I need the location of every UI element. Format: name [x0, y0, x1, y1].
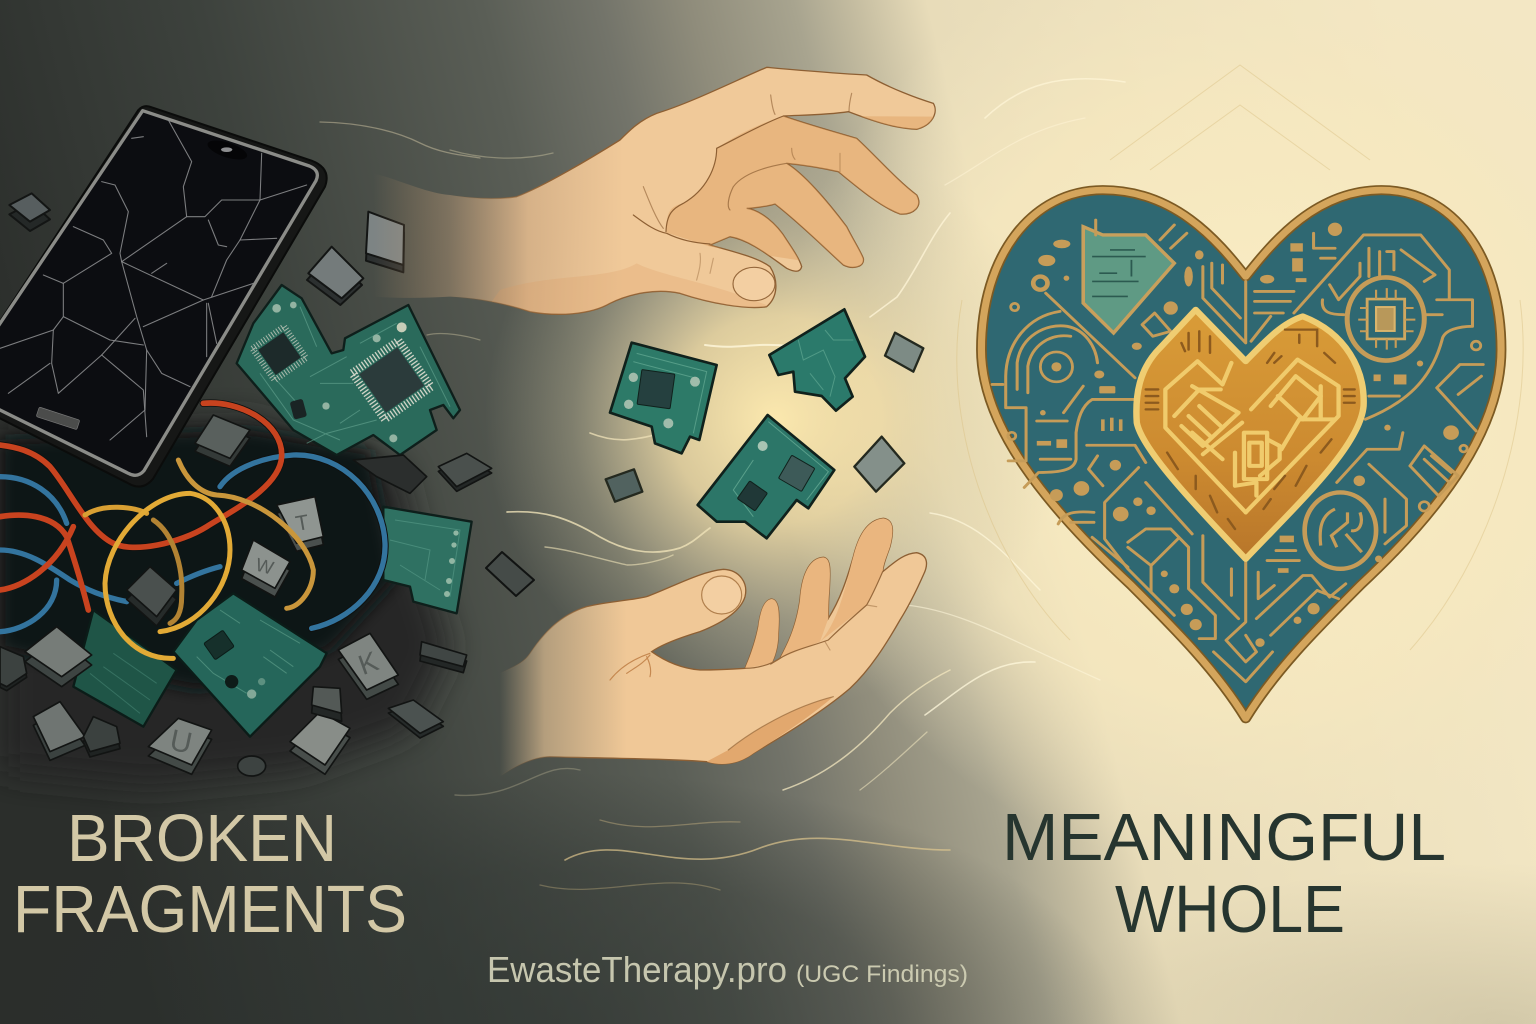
keycaps on top of the wires — [127, 540, 290, 626]
circuit board: upper pile board — [237, 285, 460, 455]
keycap letters: K — [354, 645, 383, 681]
fragment: jagged board, top — [769, 309, 865, 411]
loose keycaps near the phone — [9, 193, 404, 305]
circuit board: lower left — [73, 610, 177, 727]
circuit ring lower right — [1305, 492, 1376, 569]
keycap letters: T — [294, 510, 311, 536]
processor ring — [1347, 277, 1424, 361]
green chip panel — [1083, 227, 1174, 333]
title: meaningful whole: MEANINGFUL — [1002, 800, 1446, 875]
keycap letters — [167, 510, 383, 761]
fragment: keycaps — [606, 333, 923, 502]
scattered pile: boards, keycaps and tangled wires — [0, 403, 492, 776]
title: meaningful whole: WHOLE — [1115, 872, 1345, 947]
circuit pads — [1037, 223, 1459, 647]
inner golden heart — [1136, 310, 1364, 559]
upper reaching hand — [373, 67, 950, 327]
flowing energy lines — [320, 79, 1125, 890]
title: broken fragments — [13, 801, 407, 947]
source credit: EwasteTherapy.pro — [487, 949, 787, 990]
title: broken fragments: BROKEN — [67, 801, 337, 876]
circuit board: centre — [173, 593, 327, 737]
loose keycap to the right of the pile — [486, 552, 534, 596]
debris pile shadow — [0, 420, 450, 785]
keycap letters: U — [167, 724, 195, 761]
circuit board: right — [383, 507, 472, 613]
tangled wires — [0, 403, 385, 658]
keycap letters: W — [253, 554, 276, 579]
source credit — [487, 949, 968, 990]
circuit ring nodes — [1008, 276, 1481, 511]
fragment: board with chip, left — [610, 343, 717, 453]
smashed phone with cracked screen — [0, 106, 327, 487]
heart outer body — [981, 190, 1501, 718]
fragment: board with two chips, bottom — [698, 415, 834, 538]
floating fragments — [606, 309, 923, 538]
lower cupped hand — [500, 518, 927, 777]
title: broken fragments: FRAGMENTS — [13, 872, 407, 947]
circuit heart — [981, 190, 1501, 718]
title: meaningful whole — [1002, 800, 1446, 947]
phone, main board and loose keycaps — [0, 106, 460, 487]
faint contour lines around the heart — [957, 65, 1523, 650]
gold circuit traces — [992, 220, 1483, 682]
keycaps — [0, 415, 492, 776]
source credit: (UGC Findings) — [796, 961, 968, 988]
